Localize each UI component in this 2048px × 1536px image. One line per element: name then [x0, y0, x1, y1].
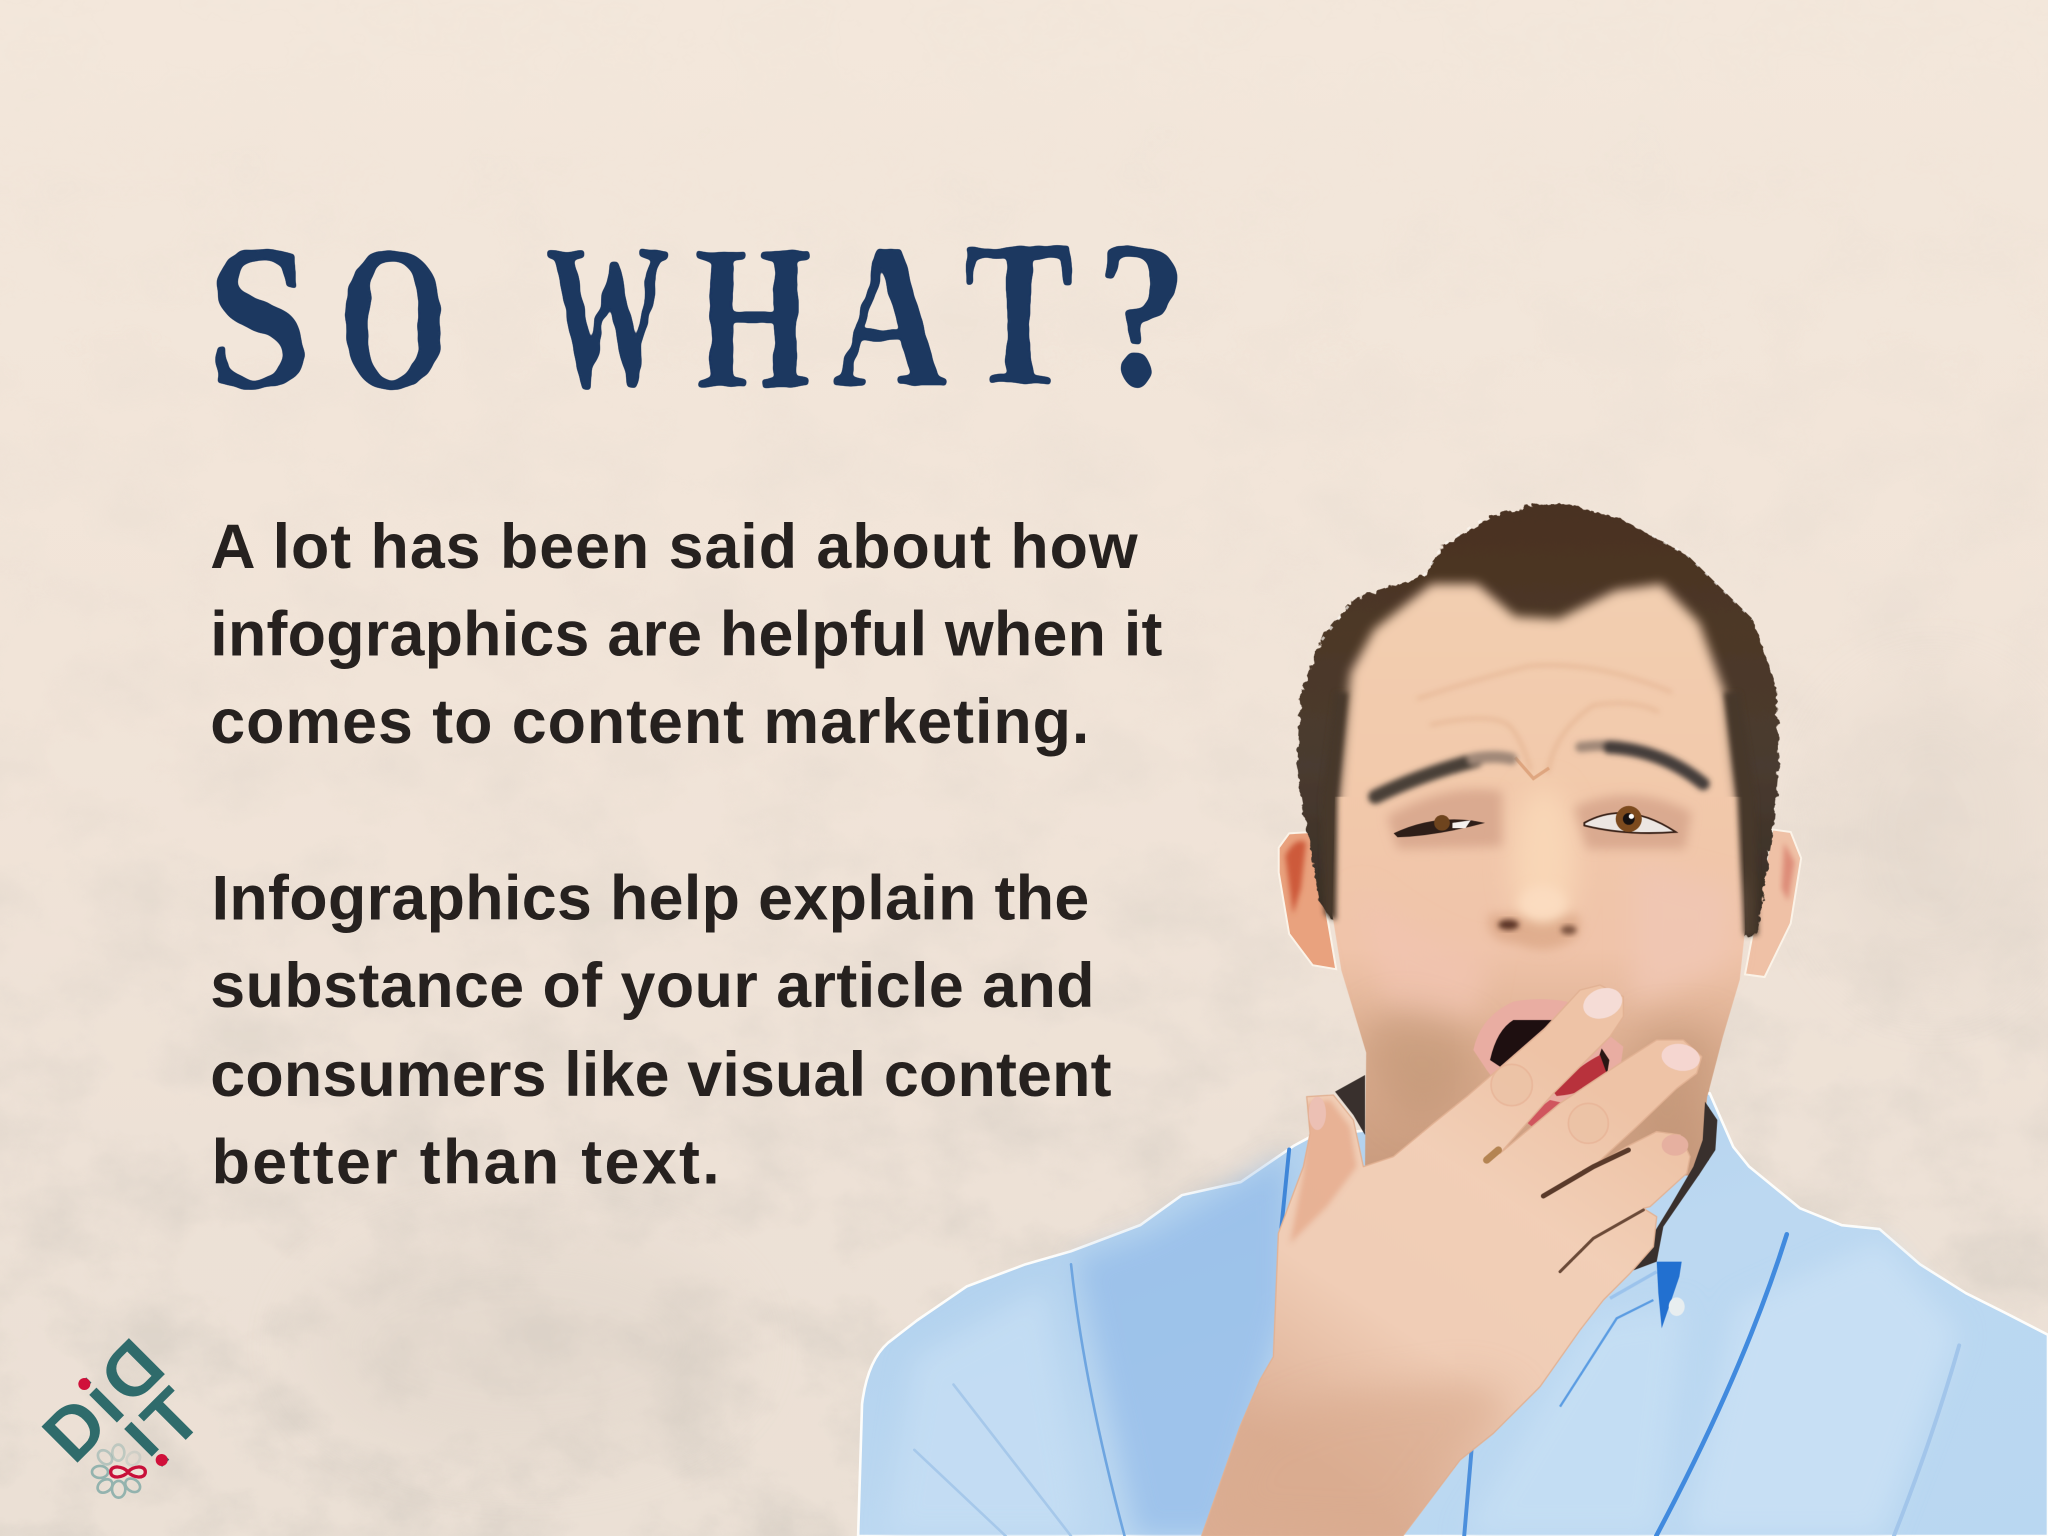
logo lettering: D [83, 1323, 180, 1420]
paragraph 1: A lot has been said about how [210, 512, 1138, 582]
title: W [546, 201, 669, 430]
logo lettering: i [109, 1407, 182, 1480]
hand shading [1210, 1100, 1520, 1536]
logo lettering: D [27, 1381, 123, 1477]
paragraph 1 [210, 512, 1163, 757]
fingernails [1309, 983, 1702, 1156]
nose [1488, 886, 1580, 950]
paragraph 2: better than text. [212, 1127, 720, 1197]
right eye [1584, 806, 1676, 833]
logo lettering: i [66, 1364, 139, 1437]
shirt [858, 1093, 2048, 1536]
title: A [832, 201, 947, 430]
forehead wrinkles [1417, 665, 1672, 773]
placket tab [1657, 1262, 1682, 1328]
eye sockets [1387, 789, 1691, 849]
title [206, 199, 1187, 433]
sideburn blends [1322, 692, 1758, 935]
chin shadow [1363, 1010, 1717, 1173]
hair [1297, 502, 1779, 940]
photo: yawning man [858, 502, 2048, 1536]
title: S [206, 203, 311, 432]
paragraph 2: Infographics help explain the [212, 864, 1089, 934]
logo flower [92, 1445, 143, 1498]
face shading [1358, 786, 1731, 1019]
logo infinity [111, 1467, 145, 1477]
mouth [1473, 999, 1623, 1133]
placket line [1560, 1300, 1653, 1407]
lower face [1332, 797, 1745, 1176]
title: O [338, 204, 448, 433]
finger gaps [1487, 1150, 1643, 1272]
hand [1202, 985, 1702, 1536]
collar shadows [1335, 1075, 1717, 1272]
logo lettering: T [126, 1373, 217, 1463]
left eye [1394, 815, 1485, 837]
paragraph 1: comes to content marketing. [210, 687, 1089, 757]
logo dots [78, 1378, 168, 1466]
knuckles [1491, 1064, 1608, 1143]
logo: did it [27, 1323, 217, 1498]
lower face, mouth and hand [1202, 983, 1717, 1536]
paragraph 2: substance of your article and [210, 951, 1095, 1021]
title: H [695, 203, 812, 432]
ears [1279, 829, 1801, 977]
shirt collar edge [1610, 1272, 1657, 1298]
forehead [1335, 584, 1742, 836]
paragraph 1: infographics are helpful when it [210, 600, 1163, 670]
background texture [0, 712, 2048, 1536]
eyebrows [1375, 745, 1703, 797]
paragraph 2 [210, 864, 1112, 1197]
shirt seams and placket [914, 1149, 1959, 1536]
title: ? [1096, 199, 1187, 428]
shirt shading [888, 1156, 1959, 1536]
title: T [964, 199, 1074, 428]
body text [210, 512, 1163, 1197]
button [1669, 1297, 1685, 1316]
face and neck [1322, 584, 1758, 1176]
paragraph 2: consumers like visual content [210, 1040, 1112, 1110]
logo lettering [27, 1323, 217, 1480]
